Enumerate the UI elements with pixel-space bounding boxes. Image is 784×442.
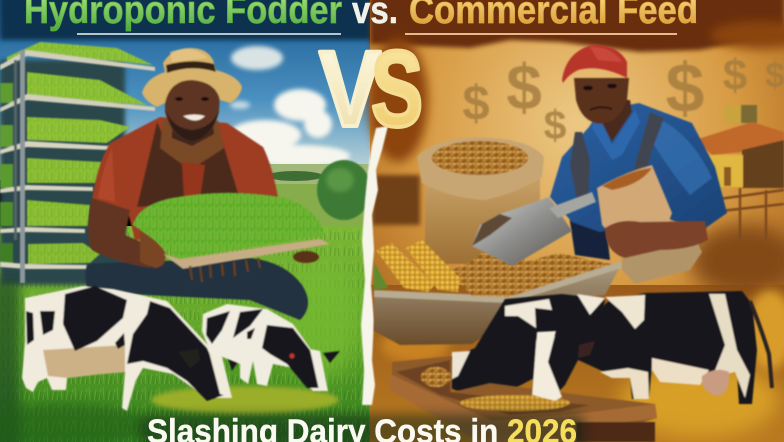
burlap sack of feed [417, 137, 544, 264]
large VS lettering [319, 28, 423, 149]
title: Hydroponic Fodder vs. Commercial Feed [24, 0, 698, 32]
dollar signs: rising cost symbols [462, 49, 784, 148]
neck and face [172, 112, 214, 146]
large VS lettering: V [319, 28, 381, 149]
fodder patch under grazing cows [151, 386, 339, 414]
cow: right side rear cow feeding [450, 294, 605, 394]
bottom title backdrop [140, 414, 585, 442]
shelving: hydroponic grass racks [0, 42, 155, 283]
title underline left [77, 33, 341, 35]
dollar signs: rising cost symbols: $ [506, 51, 542, 123]
tray of hydroponic fodder [133, 193, 330, 282]
dollar signs: rising cost symbols: $ [723, 51, 747, 100]
red shirt [92, 117, 278, 240]
dollar signs: rising cost symbols: $ [544, 102, 567, 148]
dollar signs: rising cost symbols: $ [666, 49, 704, 127]
jeans [85, 258, 308, 320]
farmhouse background [695, 105, 784, 240]
dollar signs: rising cost symbols: $ [462, 77, 490, 131]
figure: worried farmer with red cap and blue shirt [550, 45, 727, 260]
paper feed bag and hands [597, 165, 708, 284]
brown apron [137, 122, 240, 207]
straw hat [142, 48, 242, 107]
figure: smiling farmer with hat holding tray of fodder [85, 48, 308, 320]
corn cobs [374, 240, 460, 292]
divider: torn white edge [361, 126, 388, 405]
wooden feed trough [390, 356, 657, 442]
large VS lettering: S [371, 28, 423, 149]
panel: commercial feed side [368, 0, 784, 442]
cow: right side front cow feeding [532, 291, 772, 404]
cow: large grazing cow, left [22, 286, 243, 411]
feed tub with grain pile [374, 234, 622, 345]
arms [88, 198, 160, 268]
title underline right [405, 33, 677, 35]
panel: hydroponic fodder side [0, 0, 380, 442]
cow: small calf, right [202, 304, 340, 391]
metal scoop [472, 192, 596, 266]
